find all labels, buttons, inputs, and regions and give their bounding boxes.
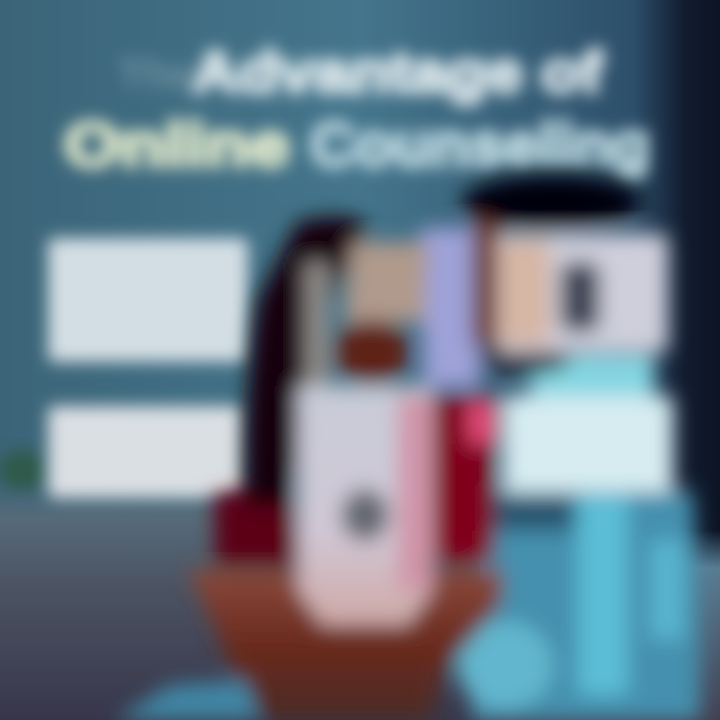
woman jeans xyxy=(115,680,260,720)
man hair side xyxy=(472,215,502,345)
title: Online xyxy=(64,111,290,180)
panel: top left card xyxy=(48,238,248,362)
purple backdrop between figures xyxy=(420,228,480,387)
man knee xyxy=(457,621,553,709)
title xyxy=(64,40,650,180)
panel: right lower card xyxy=(503,396,673,492)
woman top left xyxy=(214,480,300,565)
title: The xyxy=(118,50,193,97)
man shirt dark area xyxy=(490,495,574,531)
title: Counseling xyxy=(310,111,650,180)
panel: man card xyxy=(498,234,668,352)
panel: center card xyxy=(298,386,432,625)
icon: center card xyxy=(341,489,389,541)
panel: bottom left card xyxy=(48,406,244,498)
center card pink band xyxy=(398,395,430,590)
man beard xyxy=(479,342,571,374)
icon: man card xyxy=(560,262,600,332)
man collar xyxy=(530,355,654,410)
man shirt highlight xyxy=(578,495,628,695)
woman hair streak xyxy=(305,262,329,392)
man body xyxy=(470,490,700,720)
plant xyxy=(0,450,46,490)
woman hair xyxy=(245,217,368,505)
man face xyxy=(500,240,550,344)
figures group xyxy=(115,175,700,720)
woman top right xyxy=(428,396,494,561)
woman arms xyxy=(188,570,504,720)
woman face xyxy=(344,242,428,322)
man shirt side highlight xyxy=(650,540,684,640)
woman top highlight xyxy=(468,400,498,444)
woman neck shadow xyxy=(334,320,410,384)
title: Advantage of xyxy=(192,40,603,105)
man hair xyxy=(462,175,642,229)
